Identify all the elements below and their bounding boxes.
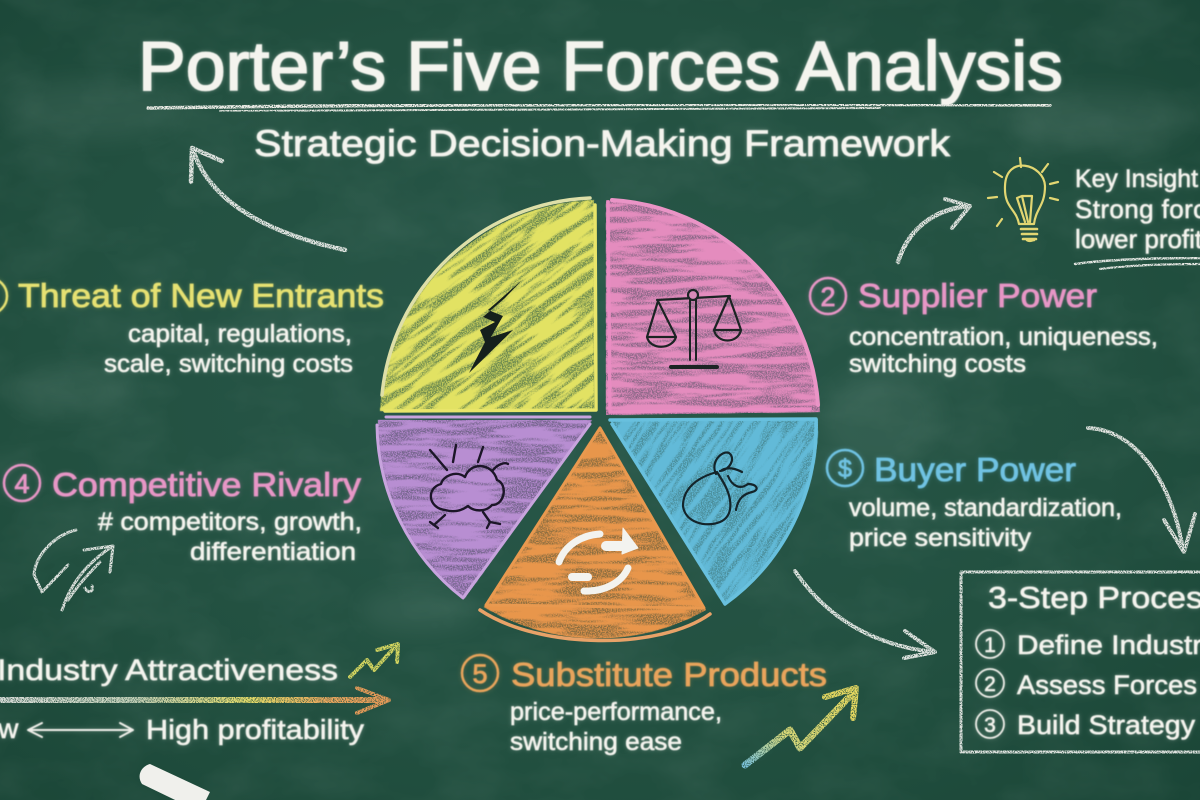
panel text: 3-Step Process xyxy=(988,580,1200,615)
icon: storm cloud xyxy=(430,445,508,528)
force 4: competitive rivalry: 4 xyxy=(14,469,30,499)
subtitle: Strategic Decision-Making Framework xyxy=(254,123,951,164)
force 1: threat of new entrants: capital, regulations, xyxy=(128,320,352,348)
icon: lightning bolt xyxy=(469,280,522,373)
force 3: buyer power: price sensitivity xyxy=(849,524,1032,552)
panel text: Assess Forces xyxy=(1017,670,1197,700)
key insight text xyxy=(1075,165,1200,254)
force 1: threat of new entrants: scale, switching costs xyxy=(104,350,353,378)
title: Porter’s Five Forces Analysis xyxy=(138,27,1063,105)
force 3: buyer power: $ xyxy=(838,455,852,483)
force 5: substitute products xyxy=(462,655,827,756)
segment: competitive rivalry xyxy=(377,417,592,598)
force 3: buyer power: Buyer Power xyxy=(874,451,1076,488)
force 5: substitute products: price-performance, xyxy=(510,698,722,726)
force 2: supplier power xyxy=(810,277,1158,378)
panel: 3-step process xyxy=(961,572,1200,752)
gradient scale arrow xyxy=(0,688,389,713)
arrow: top left xyxy=(191,148,345,250)
pie chart: five forces xyxy=(281,99,905,703)
force 4: competitive rivalry: differentiation xyxy=(190,538,356,566)
scale heading: Industry Attractiveness xyxy=(0,654,338,687)
piece of chalk xyxy=(140,764,210,800)
industry attractiveness scale xyxy=(0,644,398,745)
icon: money bags xyxy=(683,453,757,524)
arrow: pie to process xyxy=(795,571,935,658)
segment: supplier power xyxy=(606,200,820,415)
key insight text: Key Insight xyxy=(1075,165,1198,193)
force 3: buyer power: volume, standardization, xyxy=(849,494,1122,522)
icon: light bulb xyxy=(988,158,1058,241)
icon: cycle arrows xyxy=(559,528,638,591)
icon: rising zigzag arrow xyxy=(745,688,856,765)
panel frame xyxy=(961,572,1200,752)
icon: scales xyxy=(647,290,741,367)
panel text: 1 xyxy=(984,634,996,657)
force 2: supplier power: 2 xyxy=(820,282,836,312)
force 4: competitive rivalry: Competitive Rivalry xyxy=(52,466,362,503)
icon: competitive arrows xyxy=(34,530,113,610)
force 1: threat of new entrants: Threat of New Entrants xyxy=(18,277,384,314)
key insight underline xyxy=(1075,258,1200,269)
force 4: competitive rivalry: # competitors, growth, xyxy=(98,508,362,536)
panel text: 3 xyxy=(984,714,996,737)
force 3: buyer power xyxy=(827,450,1122,552)
force 5: substitute products: Substitute Products xyxy=(511,656,827,693)
force 2: supplier power: concentration, uniqueness, xyxy=(849,323,1158,351)
title underline xyxy=(148,104,1050,111)
force 2: supplier power: switching costs xyxy=(849,350,1026,378)
force 1: threat of new entrants xyxy=(0,277,384,378)
panel text: 2 xyxy=(984,673,996,696)
force 2: supplier power: Supplier Power xyxy=(858,277,1097,314)
arrow: insight to bulb xyxy=(898,199,970,262)
scale labels xyxy=(0,713,364,745)
panel text: Define Industry xyxy=(1017,630,1200,660)
segment: threat of new entrants xyxy=(281,99,693,512)
segment: substitute products xyxy=(480,426,710,641)
arrow: down to process xyxy=(1088,428,1195,552)
force 5: substitute products: switching ease xyxy=(510,728,682,756)
force 4: competitive rivalry xyxy=(4,465,362,566)
force 5: substitute products: 5 xyxy=(472,659,488,689)
icon: yellow trend arrow xyxy=(350,644,398,677)
panel text xyxy=(976,580,1200,740)
scale labels: High profitability xyxy=(146,714,364,745)
segment: buyer power xyxy=(523,321,905,703)
panel text: Build Strategy xyxy=(1017,710,1196,740)
